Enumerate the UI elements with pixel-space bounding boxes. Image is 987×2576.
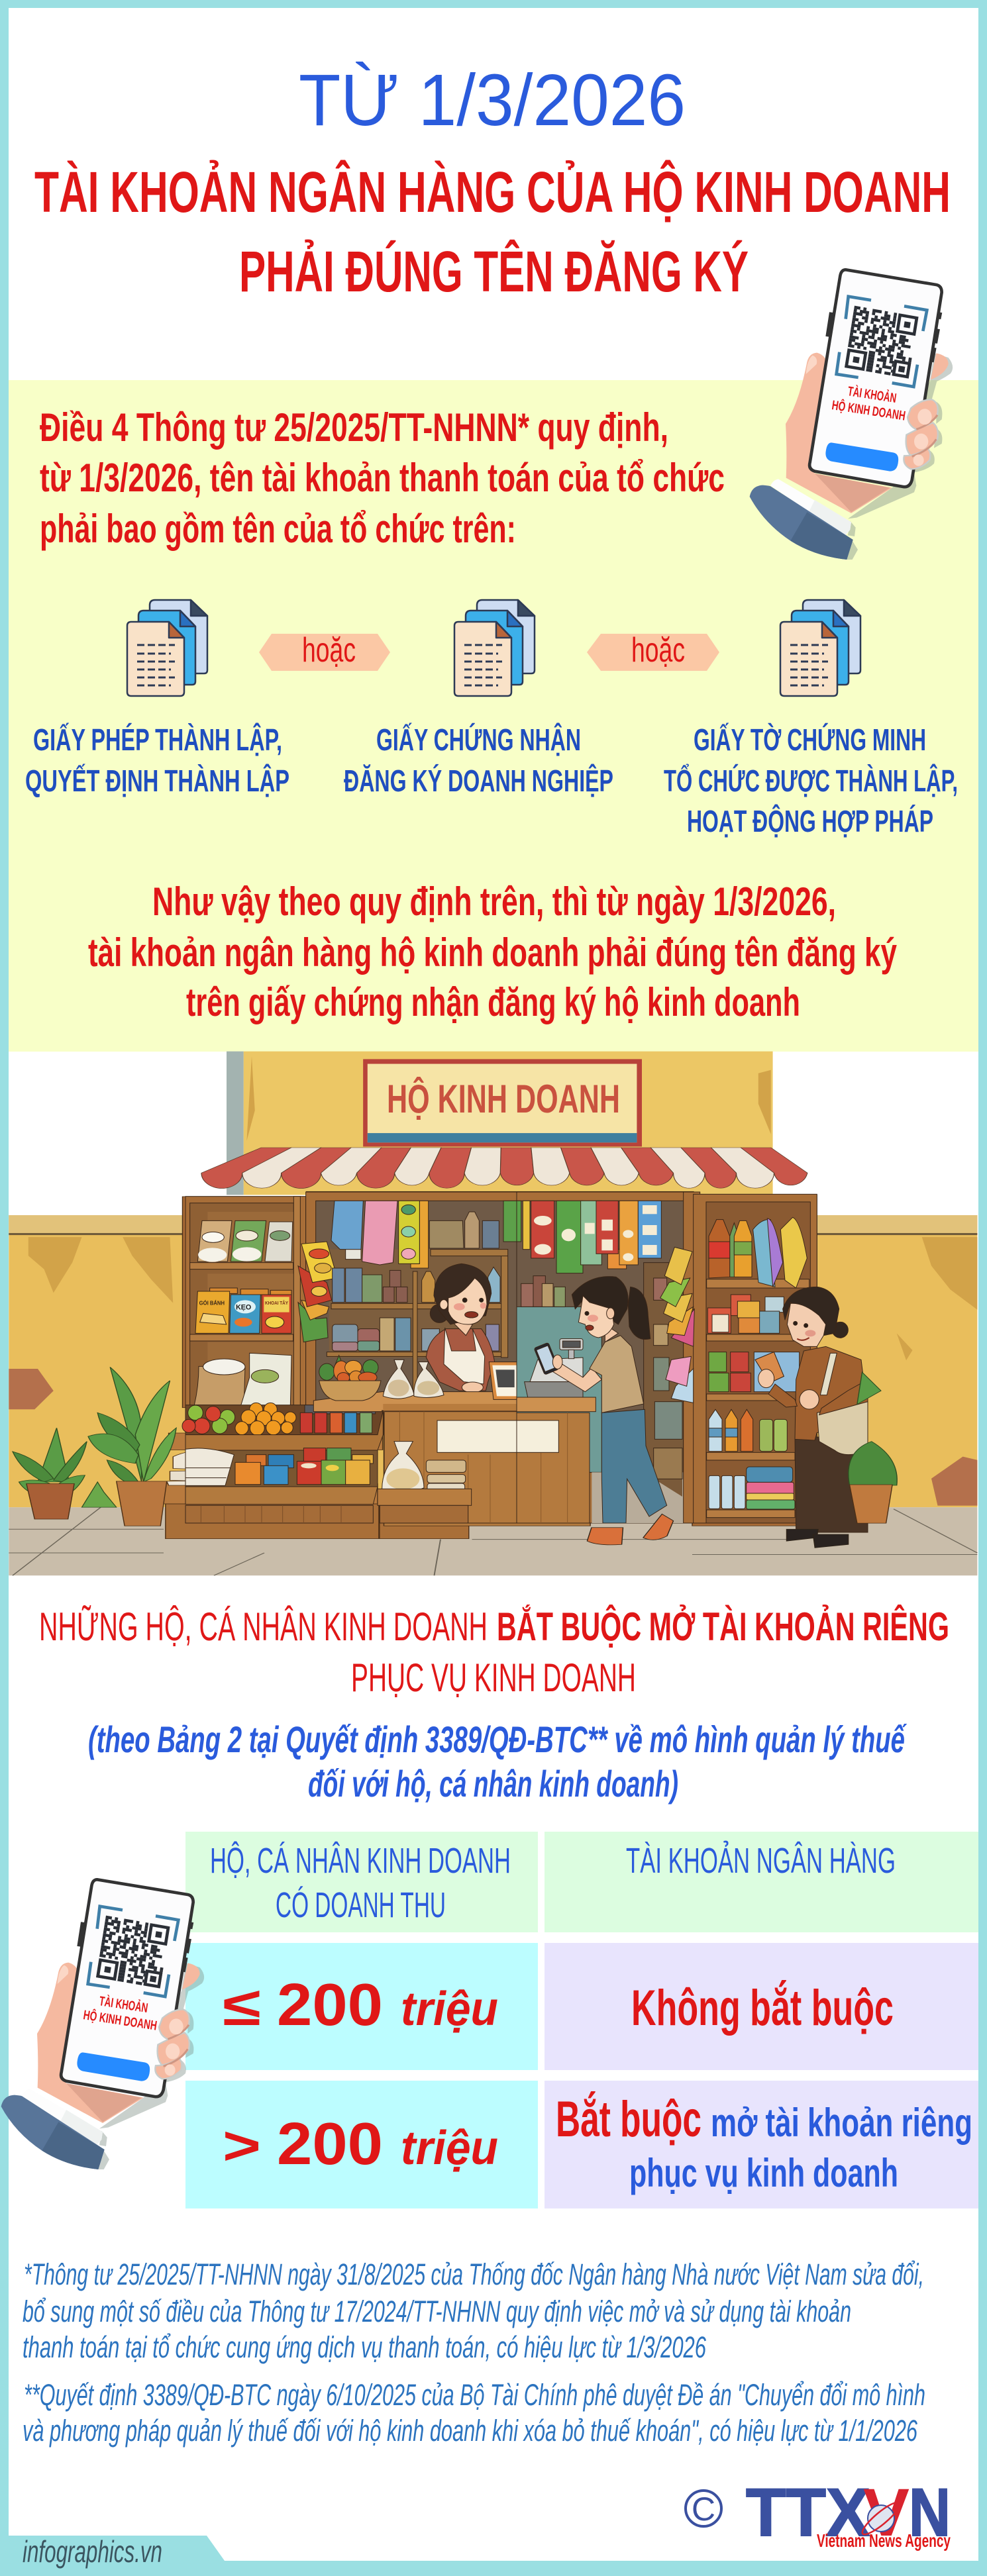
row 1: revenue up to 200 million: ≤ (223, 1977, 261, 2037)
shop sign (363, 1059, 642, 1146)
connector: hoặc 1: hoặc (302, 631, 356, 669)
row 2: revenue above 200 million: 200 (277, 2111, 383, 2177)
customer (601, 1409, 667, 1523)
base frame (158, 1191, 817, 1539)
icon: hand holding phone with QR (750, 270, 953, 560)
logo: TTXVN: N (909, 2475, 951, 2550)
heading: mandatory account: NHỮNG HỘ, CÁ NHÂN KINH DOANH (39, 1605, 488, 1649)
icon: documents 3 (780, 600, 860, 696)
second phone label text: HỘ KINH DOANH (82, 2006, 158, 2034)
subheading: legal reference (88, 1718, 907, 1805)
QR code (845, 306, 919, 379)
logo: copyright (686, 2491, 721, 2528)
heading: mandatory account: PHỤC VỤ KINH DOANH (351, 1656, 636, 1700)
awning (201, 1148, 807, 1189)
shop interior left half: KẸO (236, 1303, 251, 1311)
illustration: shop scene (9, 1052, 977, 1575)
shop interior left half (182, 1192, 517, 1523)
label: document type 1: QUYẾT ĐỊNH THÀNH LẬP (25, 764, 289, 798)
right shelf stock (730, 1223, 739, 1277)
shoes (587, 1514, 849, 1548)
hanging cloths (346, 1250, 361, 1260)
footnotes: thanh toán tại tổ chức cung ứng dịch vụ thanh toán, có hiệu lực từ 1/3/2026 (23, 2330, 707, 2364)
counter (384, 1412, 517, 1523)
sacks on counter (383, 1360, 414, 1399)
table header: revenue (185, 1832, 538, 1932)
phone label text: TÀI KHOẢN (847, 383, 898, 406)
text: regulation intro: Điều 4 Thông tư 25/2025/TT-NHNN* quy định, (40, 405, 668, 450)
phone label text (831, 383, 907, 424)
table header: revenue: HỘ, CÁ NHÂN KINH DOANH (210, 1841, 511, 1881)
counter (517, 1412, 590, 1523)
row 2: mandatory (545, 2081, 978, 2208)
panel: regulation background (9, 380, 978, 1052)
icon: documents 2 (454, 600, 535, 696)
cash register (530, 1358, 583, 1382)
produce stand bag (382, 1442, 424, 1493)
footer tab: infographics.vn (0, 2534, 987, 2576)
label: document type 2: ĐĂNG KÝ DOANH NGHIỆP (344, 764, 613, 798)
row 1: revenue up to 200 million: 200 (277, 1972, 383, 2038)
fruit crate (185, 1405, 383, 1435)
row 2: revenue above 200 million: triệu (401, 2122, 498, 2175)
footnotes (23, 2257, 925, 2448)
icon: documents 1 (127, 600, 207, 696)
shop interior right half (517, 1192, 868, 1532)
text: regulation intro: từ 1/3/2026, tên tài khoản thanh toán của tổ chức (40, 456, 725, 500)
icon: second hand holding phone (1, 1879, 204, 2169)
walls and pavement (9, 1052, 977, 1575)
label: document type 2 (344, 722, 613, 798)
shop interior left half: KHOAI TÂY (265, 1300, 288, 1306)
shelf stock (333, 1268, 362, 1303)
phone body (809, 270, 942, 487)
logo: copyright: C (692, 2491, 715, 2528)
label: document type 1 (25, 722, 289, 798)
fingers (904, 399, 938, 469)
plants (13, 1367, 897, 1526)
text: regulation intro: phải bao gồm tên của tổ chức trên: (40, 507, 516, 551)
shelf bags (197, 1220, 232, 1262)
title: headline (34, 160, 951, 304)
connector: hoặc 2 (587, 631, 719, 671)
row 2: revenue above 200 million (185, 2081, 538, 2208)
footer tab: infographics.vn: infographics.vn (23, 2534, 162, 2569)
text: regulation intro (40, 405, 725, 551)
QR stand (489, 1362, 517, 1399)
label: document type 3 (664, 722, 958, 838)
table (185, 1832, 978, 2208)
connector: hoặc 2: hoặc (631, 631, 685, 669)
row 1: revenue up to 200 million: triệu (401, 1983, 498, 2036)
second phone label text: TÀI KHOẢN (98, 1993, 149, 2016)
title: headline: PHẢI ĐÚNG TÊN ĐĂNG KÝ (239, 239, 749, 304)
hanging packs (517, 1201, 521, 1242)
packet crate (185, 1450, 378, 1487)
heading: mandatory account (39, 1605, 949, 1700)
table header: revenue: CÓ DOANH THU (276, 1885, 446, 1925)
connector: hoặc 1 (259, 631, 390, 671)
label: document type 1: GIẤY PHÉP THÀNH LẬP, (33, 722, 282, 757)
basket of fruit (319, 1363, 335, 1380)
logo: TTXVN (746, 2475, 951, 2551)
row 1: revenue up to 200 million (185, 1943, 538, 2070)
row 2: mandatory: Bắt buộc (556, 2091, 701, 2148)
second phone label text (82, 1993, 158, 2034)
text: conclusion (88, 879, 897, 1024)
label: document type 2: GIẤY CHỨNG NHẬN (376, 722, 581, 757)
phone label text: HỘ KINH DOANH (831, 397, 907, 424)
hanging packets (298, 1303, 328, 1342)
row 2: revenue above 200 million: > (223, 2116, 261, 2176)
table header: bank account (545, 1832, 978, 1932)
shop sign text: HỘ KINH DOANH (387, 1077, 620, 1121)
shopkeeper (426, 1329, 495, 1391)
shop interior left half: GÓI BÁNH (199, 1301, 225, 1307)
logo: TTXVN: V (863, 2475, 909, 2550)
row 1: not mandatory (545, 1943, 978, 2070)
subheading: legal reference: đối với hộ, cá nhân kinh doanh) (308, 1763, 678, 1805)
title: date: TỪ 1/3/2026 (299, 60, 686, 141)
door shelf stock (654, 1358, 669, 1391)
background bottles (521, 1283, 533, 1307)
logo: TTXVN: TTX (746, 2475, 870, 2550)
older customer (795, 1437, 868, 1532)
